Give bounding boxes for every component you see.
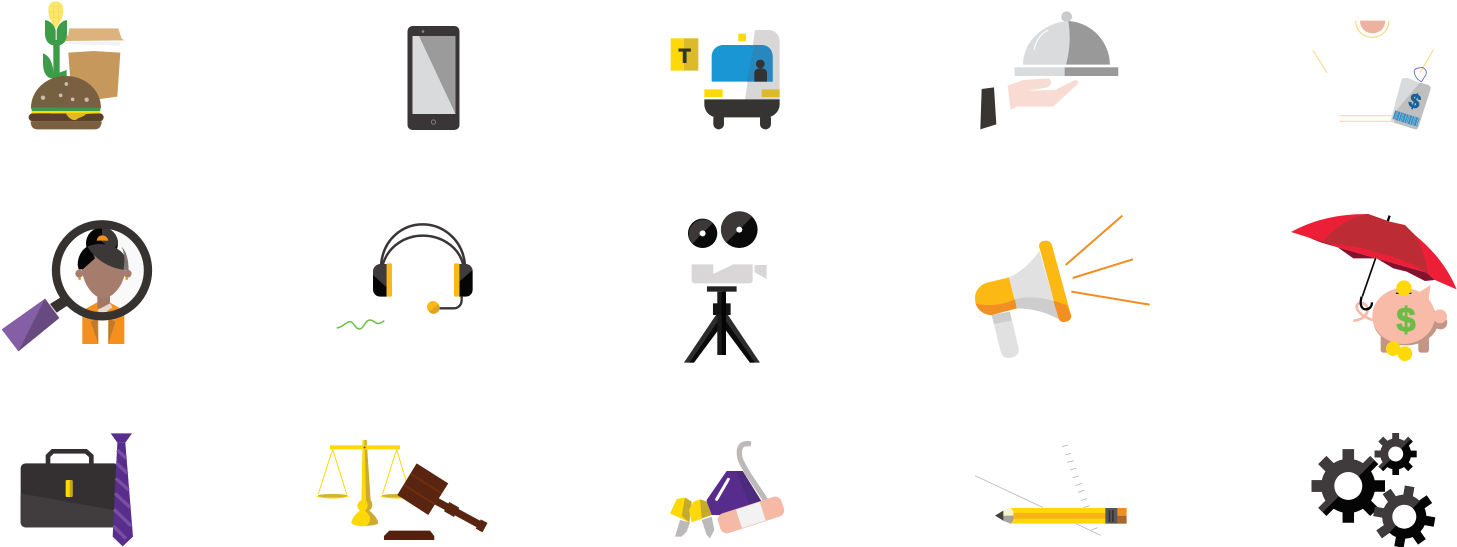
bus body (704, 30, 780, 129)
icon: t-shirt with price tag (1313, 21, 1434, 129)
cone (1009, 251, 1059, 319)
green wave (337, 320, 384, 329)
price tag: $ (1406, 90, 1424, 114)
microphone boom (427, 297, 462, 314)
umbrella hook (1361, 297, 1372, 309)
bandage (716, 495, 786, 535)
person (75, 227, 132, 344)
yellow caps (670, 498, 712, 522)
ear cups (373, 263, 473, 297)
collar (1356, 21, 1389, 37)
icon: bus (671, 30, 780, 129)
lens ring (56, 224, 148, 316)
coins (1386, 280, 1412, 361)
icon: pencil and ruler (975, 445, 1127, 535)
gray legs (675, 517, 714, 538)
icon: magnifier over person (2, 224, 148, 351)
gray tube (739, 444, 767, 502)
piggy bank (1372, 285, 1447, 353)
rim (1039, 241, 1071, 322)
briefcase (21, 451, 119, 527)
icon: megaphone (975, 216, 1150, 358)
large gear (1312, 449, 1385, 523)
icon: briefcase and tie (21, 433, 133, 546)
burger (29, 76, 104, 129)
canopy (1291, 214, 1457, 289)
icon: flask with bandage (670, 444, 786, 538)
icon: film camera on tripod (684, 211, 767, 363)
tail (1353, 303, 1373, 321)
icon: umbrella over piggy bank (1291, 214, 1457, 361)
handle (2, 299, 59, 351)
mouthpiece (975, 277, 1017, 315)
phone screen (412, 36, 456, 114)
serving hand (1008, 78, 1078, 110)
umbrella shaft (1362, 216, 1390, 297)
connector (50, 297, 68, 313)
medium gear (1373, 486, 1436, 547)
ruler lines (975, 445, 1101, 535)
megaphone handle (992, 312, 1019, 358)
gavel (397, 463, 485, 528)
coffee cup (63, 28, 125, 99)
tie (111, 433, 133, 546)
icon: food and drink (29, 1, 125, 129)
flask (707, 471, 763, 515)
small gear (1375, 433, 1417, 475)
icon: serving cloche (980, 11, 1118, 129)
scales of justice (316, 440, 413, 526)
sound lines (1066, 216, 1150, 305)
pencil (995, 508, 1127, 524)
dome (1015, 11, 1118, 76)
lens background (102, 227, 146, 314)
piggy bank: $ (1396, 301, 1416, 339)
shirt outline (1313, 49, 1434, 121)
icon: gears (1312, 433, 1440, 547)
corn plant (43, 1, 67, 78)
icon: headset (337, 224, 473, 329)
gavel block (384, 531, 434, 540)
icon: smartphone (408, 26, 460, 130)
sleeve cuff (980, 87, 996, 129)
headband (381, 224, 465, 265)
icon: scales and gavel (316, 440, 485, 540)
camera body (692, 264, 767, 283)
film reels (688, 211, 758, 248)
T stop sign: T (679, 46, 691, 67)
tripod (684, 286, 760, 363)
